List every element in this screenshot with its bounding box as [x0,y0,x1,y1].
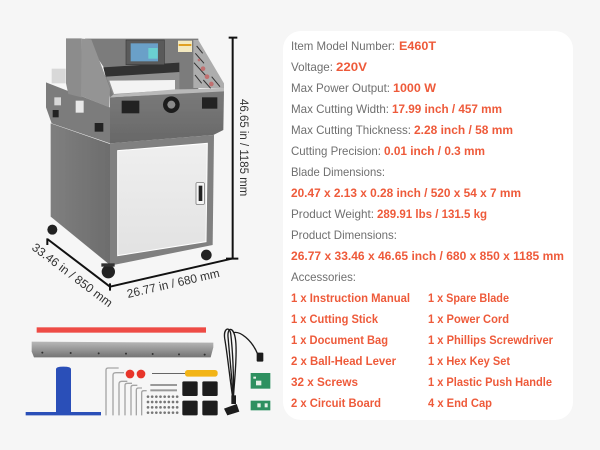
dimension: height arrow [226,38,238,259]
accessories list: 2 x Circuit Board [291,396,381,410]
spec: max power output: Max Power Output: [291,81,390,95]
spec: voltage: Voltage: [291,60,333,74]
spec: voltage [291,60,367,74]
spec: item model number: E460T [399,39,437,53]
accessories list: 1 x Document Bag [291,333,388,347]
accessories list: 1 x Spare Blade [428,291,509,305]
spec: product dimensions [291,228,564,263]
product: paper cutting machine [46,38,224,278]
spec: max cutting width: 17.99 inch / 457 mm [392,102,502,116]
panel: specifications [283,31,573,420]
hex key set [106,368,147,415]
end caps [182,381,218,415]
spec: cutting precision: 0.01 inch / 0.3 mm [384,144,485,158]
accessories list: 1 x Hex Key Set [428,354,510,368]
accessories list: 4 x End Cap [428,396,492,410]
accessories list [291,270,553,410]
spec: max cutting thickness: Max Cutting Thickness: [291,123,411,137]
spec: blade dimensions [291,165,521,200]
spare blade [32,342,213,357]
dimension: height label: 46.65 in / 1185 mm [237,99,251,196]
accessories list: 32 x Screws [291,375,358,389]
accessories illustration [26,327,270,415]
spec: product weight: 289.91 lbs / 131.5 kg [377,207,487,221]
spec: item model number: Item Model Number: [291,39,395,53]
spec: product dimensions: Product Dimensions: [291,228,397,242]
accessories list: 2 x Ball-Head Lever [291,354,396,368]
power cord [224,329,263,415]
accessories list: Accessories: [291,270,356,284]
spec: product weight: Product Weight: [291,207,374,221]
spec: voltage: 220V [336,60,367,74]
spec: product weight [291,207,487,221]
spec: cutting precision: Cutting Precision: [291,144,381,158]
dimension: depth arrow [47,238,110,291]
circuit boards [251,373,270,410]
spec: max power output: 1000 W [393,81,437,95]
dimension: depth label: 33.46 in / 850 mm [29,240,115,310]
cutting stick [37,327,206,333]
spec: blade dimensions: 20.47 x 2.13 x 0.28 inch / 520 x 54 x 7 mm [291,186,521,200]
spec: product dimensions: 26.77 x 33.46 x 46.65 inch / 680 x 850 x 1185 mm [291,249,564,263]
spec: max cutting thickness: 2.28 inch / 58 mm [414,123,513,137]
accessories list: 1 x Cutting Stick [291,312,378,326]
dimension: width label: 26.77 in / 680 mm [126,266,221,301]
spec: max cutting width [291,102,502,116]
screws [148,384,178,413]
plastic push handle [26,367,101,415]
spec: max cutting width: Max Cutting Width: [291,102,389,116]
accessories list: 1 x Power Cord [428,312,509,326]
spec: cutting precision [291,144,485,158]
ball-head levers [126,370,145,378]
accessories list: 1 x Plastic Push Handle [428,375,552,389]
spec: blade dimensions: Blade Dimensions: [291,165,385,179]
spec: max cutting thickness [291,123,513,137]
accessories list: 1 x Instruction Manual [291,291,410,305]
phillips screwdriver [152,370,218,377]
dimension: width arrow [110,258,233,287]
accessories list: 1 x Phillips Screwdriver [428,333,553,347]
